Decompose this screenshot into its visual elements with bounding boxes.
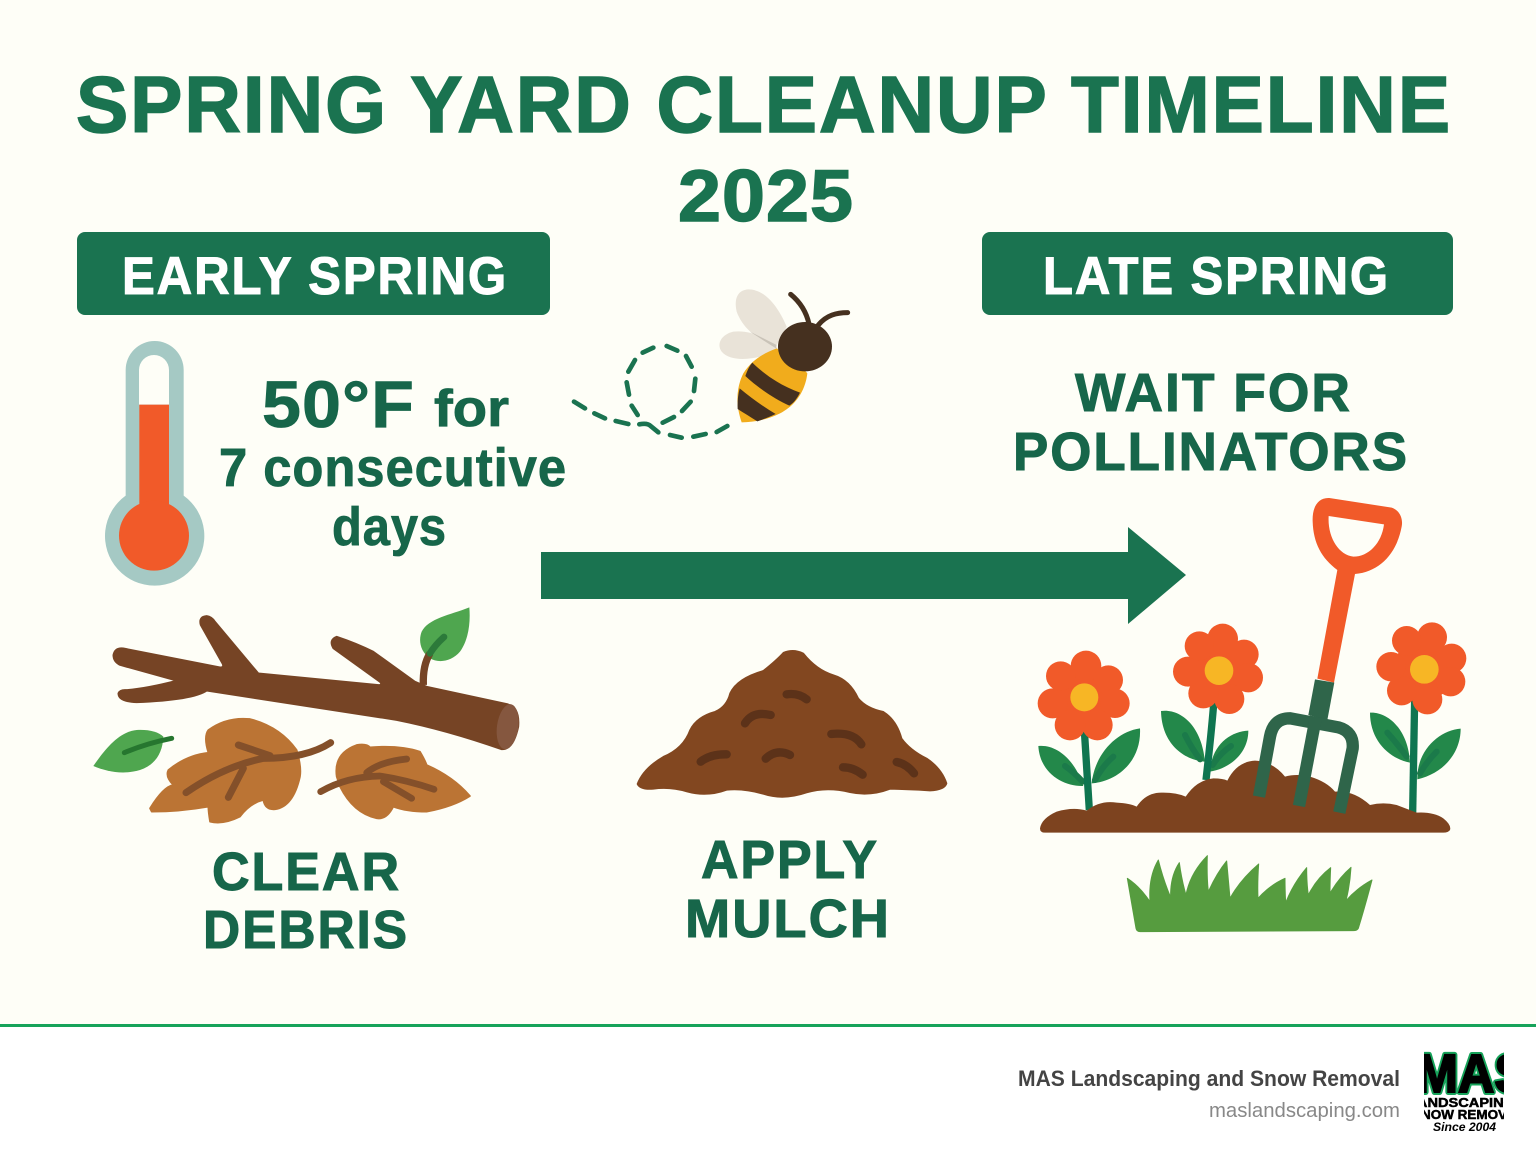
flowers 1 and 2 foliage — [1038, 700, 1248, 810]
text: apply mulch — [685, 830, 891, 949]
garden fork — [1259, 498, 1402, 813]
footer website: maslandscaping.com — [1209, 1100, 1400, 1122]
text: clear debris: CLEAR — [212, 842, 401, 902]
panel: early spring header — [77, 232, 550, 315]
title: SPRING YARD CLEANUP TIMELINE — [76, 60, 1452, 149]
text: temperature rule: 7 consecutive — [219, 438, 567, 498]
green leaf on branch — [420, 607, 470, 685]
icon: branch and leaves — [93, 607, 521, 823]
soil mound — [1040, 761, 1450, 833]
panel: late spring header — [982, 232, 1453, 315]
title: 2025 — [678, 156, 854, 237]
logo: LANDSCAPING — [1408, 1095, 1515, 1110]
logo: SNOW REMOVAL — [1412, 1107, 1524, 1122]
panel: early spring header: EARLY SPRING — [122, 247, 508, 306]
text: temperature rule: 50°F — [262, 367, 415, 441]
flower 1 blossom — [1038, 651, 1130, 740]
flower 3 — [1370, 622, 1466, 813]
text: wait for pollinators: POLLINATORS — [1013, 422, 1409, 482]
branch — [113, 616, 521, 751]
bee head — [778, 294, 848, 371]
panel: late spring header: LATE SPRING — [1043, 247, 1390, 306]
dry leaf right — [321, 745, 470, 819]
bee wings — [719, 289, 787, 359]
text: wait for pollinators: WAIT FOR — [1075, 363, 1352, 423]
footer — [0, 1024, 1536, 1154]
logo: Since 2004 — [1433, 1120, 1496, 1134]
text: apply mulch: APPLY — [701, 830, 879, 890]
grass — [1127, 856, 1372, 932]
text: temperature rule: for — [434, 380, 509, 438]
footer company name: MAS Landscaping and Snow Removal — [1018, 1066, 1400, 1091]
flowers and soil layer — [1038, 622, 1466, 833]
text: temperature rule — [219, 367, 567, 557]
flight path — [574, 346, 727, 438]
text: temperature rule: days — [332, 497, 447, 557]
title — [76, 60, 1452, 237]
green leaf on ground — [93, 730, 172, 772]
icon: mulch pile — [637, 651, 947, 797]
text: clear debris: DEBRIS — [203, 900, 409, 960]
flower 2 blossom — [1173, 624, 1263, 714]
icon: bee with dashed flight path — [574, 289, 848, 438]
icon: garden with flowers and fork — [1038, 498, 1466, 932]
arrow: timeline — [541, 527, 1186, 624]
bee body — [737, 348, 807, 422]
icon: thermometer — [105, 341, 204, 586]
dry leaf left — [150, 719, 331, 823]
text: clear debris — [203, 842, 409, 960]
logo — [1408, 1044, 1528, 1134]
text: apply mulch: MULCH — [685, 889, 891, 949]
text: wait for pollinators — [1013, 363, 1409, 482]
